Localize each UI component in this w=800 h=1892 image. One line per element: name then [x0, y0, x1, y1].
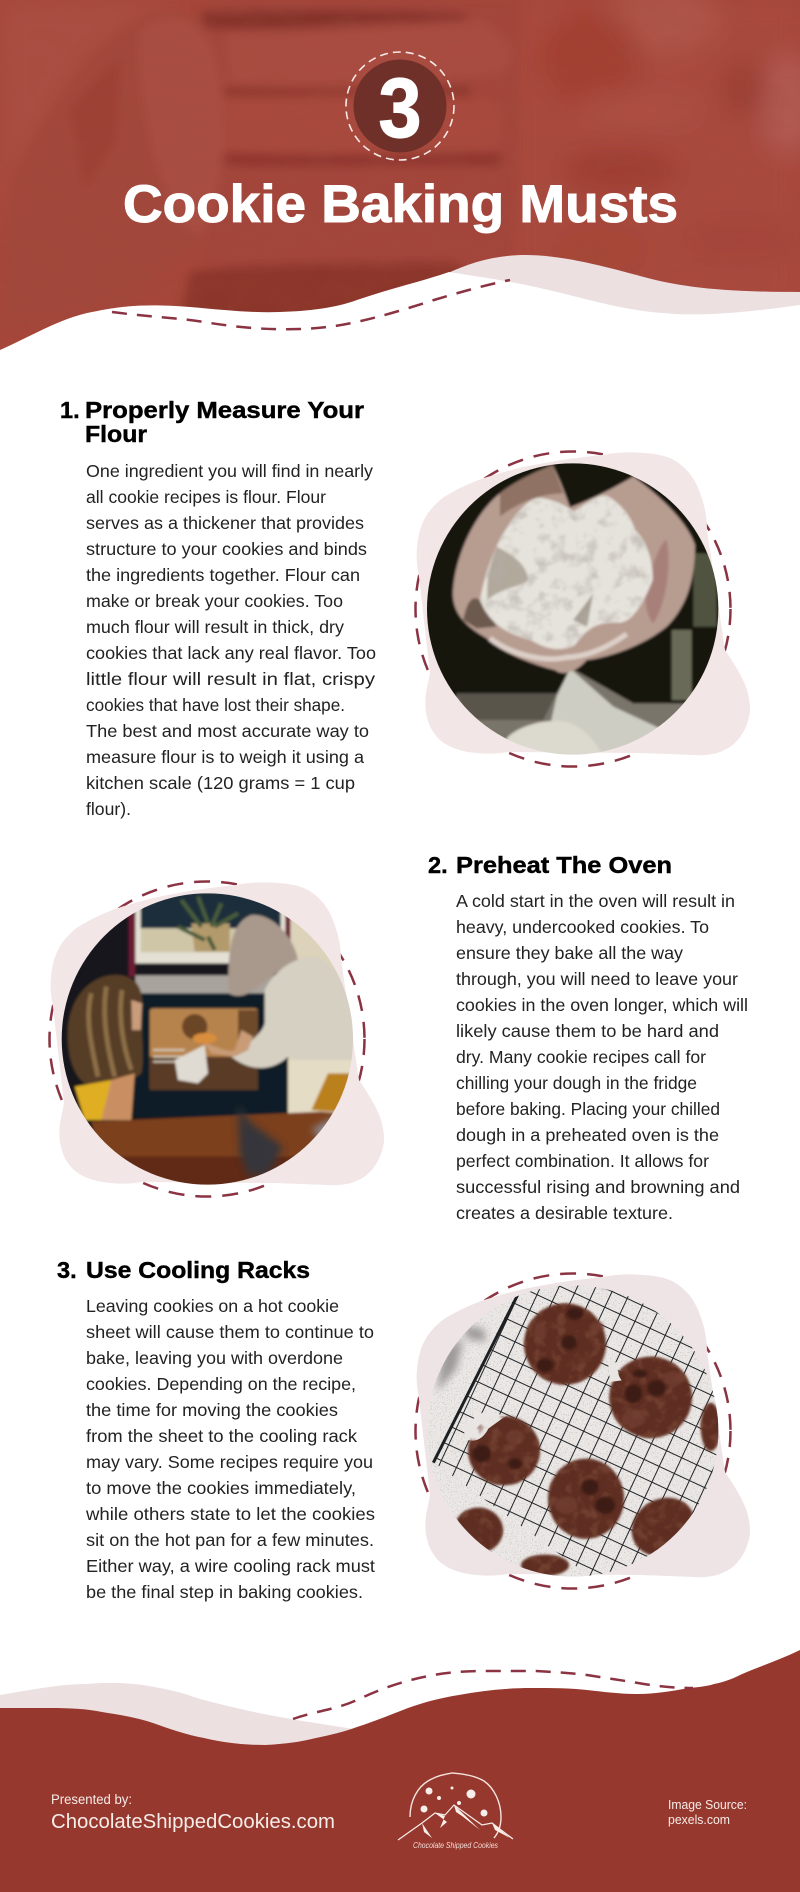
table: [90, 1109, 334, 1158]
presented by: [51, 1792, 335, 1833]
photo: oven scene: [58, 890, 358, 1190]
body text: section 2: likely cause them to be hard and: [456, 1021, 719, 1041]
photo: cookies on cooling rack: [427, 1285, 718, 1577]
body text: section 1: flour).: [86, 799, 131, 819]
footer wave: pink band: [0, 1683, 360, 1760]
plant: [191, 923, 230, 952]
body text: section 1: structure to your cookies and binds: [86, 539, 367, 559]
body text: section 2: ensure they bake all the way: [456, 943, 683, 963]
chips: [472, 1308, 666, 1514]
body text: section 1: the ingredients together. Flour can: [86, 565, 360, 585]
body text: section 3: the time for moving the cookies: [86, 1400, 338, 1420]
stacked cookies: [215, 0, 520, 400]
body text: section 3: [85, 1296, 375, 1602]
body text: section 2: chilling your dough in the fridge: [456, 1073, 697, 1093]
dashed footer line: [293, 1671, 693, 1719]
body text: section 1: all cookie recipes is flour. Flour: [86, 487, 326, 507]
body text: section 3: may vary. Some recipes require you: [86, 1452, 373, 1472]
image source: pexels.com: [668, 1813, 730, 1827]
body text: section 3: Leaving cookies on a hot cookie: [86, 1296, 339, 1316]
body text: section 2: perfect combination. It allows for: [456, 1151, 709, 1171]
hands: [453, 465, 695, 673]
presented by: ChocolateShippedCookies.com: [51, 1810, 335, 1833]
footer background: [0, 1650, 800, 1892]
body text: section 3: to move the cookies immediately,: [86, 1478, 356, 1498]
body text: section 2: dry. Many cookie recipes call for: [456, 1047, 706, 1067]
body text: section 3: Either way, a wire cooling rack must: [86, 1556, 375, 1576]
heading: properly measure: Properly Measure Your: [85, 397, 364, 423]
body text: section 3: from the sheet to the cooling rack: [86, 1426, 357, 1446]
body text: section 1: little flour will result in flat, crispy: [86, 669, 375, 689]
woman: [229, 915, 298, 996]
panel: section 1 photo: [416, 452, 750, 766]
body text: section 2: through, you will need to leave your: [456, 969, 738, 989]
photo: hands holding flour: [423, 460, 723, 760]
body text: section 1: much flour will result in thick, dry: [86, 617, 344, 637]
title: Cookie Baking Musts: [123, 175, 678, 234]
body text: section 3: be the final step in baking cookies.: [86, 1582, 363, 1602]
heading: preheat: Preheat The Oven: [456, 852, 672, 878]
image source: Image Source:: [668, 1798, 747, 1812]
badge: number 3: 3: [378, 61, 422, 155]
heading: properly measure: 1.: [60, 397, 80, 423]
dashed header line: [112, 280, 510, 329]
header panel: [0, 0, 800, 350]
body text: section 1: serves as a thickener that provides: [86, 513, 364, 533]
logo: Chocolate Shipped Cookies: [413, 1841, 498, 1850]
body text: section 3: bake, leaving you with overdone: [86, 1348, 343, 1368]
body text: section 2: heavy, undercooked cookies. To: [456, 917, 709, 937]
body text: section 1: [86, 461, 376, 819]
panel: section 2 text: [428, 852, 748, 1223]
white header wave: [0, 272, 800, 420]
image source: [668, 1798, 747, 1827]
badge: number 3: [346, 52, 454, 160]
body text: section 1: measure flour is to weigh it using a: [86, 747, 364, 767]
body text: section 2: cookies in the oven longer, which will: [456, 995, 748, 1015]
heading: cooling racks: Use Cooling Racks: [86, 1257, 310, 1283]
body text: section 3: while others state to let the cookies: [85, 1504, 375, 1524]
leaning cookie: [0, 12, 226, 325]
heading: properly measure: Flour: [85, 421, 147, 447]
panel: section 3 photo: [416, 1265, 750, 1589]
body text: section 2: [456, 891, 748, 1223]
panel: section 2 photo: [50, 882, 384, 1196]
body text: section 3: cookies. Depending on the recipe,: [86, 1374, 356, 1394]
body text: section 2: before baking. Placing your chilled: [456, 1099, 720, 1119]
logo: [398, 1773, 513, 1850]
heading: properly measure: [60, 397, 364, 447]
heading: preheat: 2.: [428, 852, 448, 878]
girl: [68, 975, 143, 1086]
body text: section 3: sit on the hot pan for a few minutes.: [86, 1530, 374, 1550]
heading: cooling racks: 3.: [57, 1257, 77, 1283]
body text: section 2: creates a desirable texture.: [456, 1203, 673, 1223]
body text: section 2: dough in a preheated oven is the: [456, 1125, 719, 1145]
body text: section 1: cookies that have lost their shape.: [86, 695, 345, 715]
panel: section 1 text: [60, 397, 376, 819]
body text: section 1: The best and most accurate way to: [86, 721, 369, 741]
body text: section 1: kitchen scale (120 grams = 1 cup: [86, 773, 355, 793]
panel: section 3 text: [57, 1257, 375, 1602]
body text: section 1: make or break your cookies. Too: [86, 591, 343, 611]
body text: section 1: One ingredient you will find in nearly: [86, 461, 373, 481]
body text: section 3: sheet will cause them to continue to: [86, 1322, 374, 1342]
body text: section 1: cookies that lack any real flavor. Too: [86, 643, 376, 663]
body text: section 2: A cold start in the oven will result in: [456, 891, 735, 911]
presented by: Presented by:: [51, 1792, 132, 1807]
footer panel: [0, 1650, 800, 1892]
wave: pink band: [450, 255, 800, 314]
body text: section 2: successful rising and browning and: [456, 1177, 740, 1197]
